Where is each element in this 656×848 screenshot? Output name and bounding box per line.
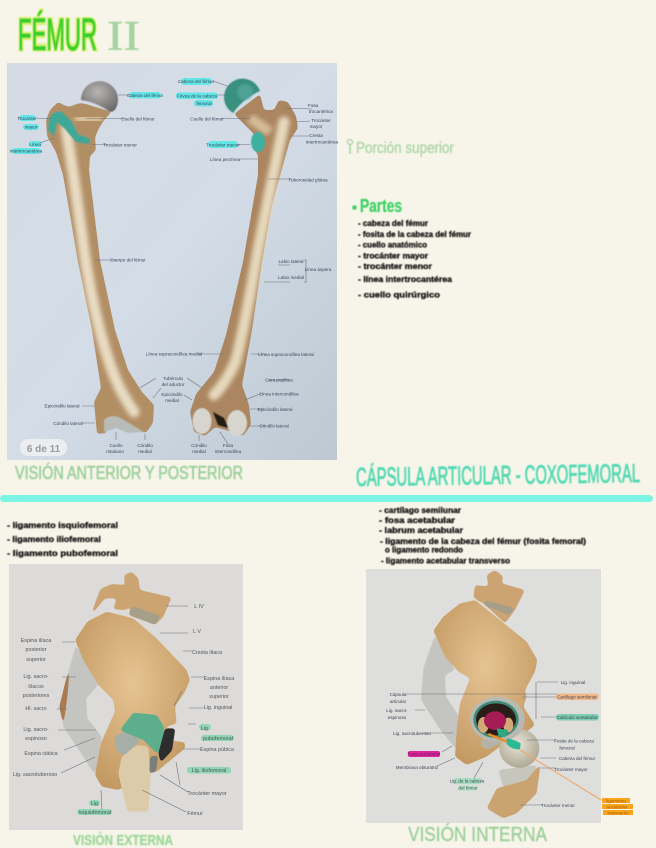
callout: orange label: transverso xyxy=(607,810,629,816)
highlighted labels posterior: Trocánter xyxy=(311,118,331,123)
panel: hip internal view photo xyxy=(366,569,601,823)
list: partes del fémur: - fosita de la cabeza del fémur xyxy=(358,230,471,239)
highlighted labels anterior: rotuliano xyxy=(106,449,124,454)
highlighted labels anterior: Cuerpo del fémur xyxy=(110,258,146,262)
labels external: Trocánter mayor xyxy=(187,791,227,797)
panel: hip external view photo xyxy=(9,564,243,830)
highlighted labels posterior: Línea supracondílea lateral xyxy=(258,352,314,357)
femur anterior bone xyxy=(46,81,154,434)
labels external: L IV xyxy=(194,604,204,610)
labels external: Lig. sacro- xyxy=(23,727,49,733)
highlighted labels posterior: mayor xyxy=(310,124,323,129)
labels external: superior xyxy=(209,694,229,700)
highlighted labels posterior: Labio lateral xyxy=(278,259,304,264)
highlighted labels posterior: medial xyxy=(192,449,206,454)
title: Fémur II: FÉMUR xyxy=(18,9,97,60)
labels internal: Trocánter menor xyxy=(541,803,575,808)
page counter badge: 6 de 11 xyxy=(27,444,61,455)
highlighted labels anterior: Trocánter menor xyxy=(103,142,137,148)
highlighted labels posterior xyxy=(146,78,339,454)
hip bone internal xyxy=(421,570,541,818)
labels internal: Cartílago semilunar xyxy=(557,694,597,700)
highlighted labels anterior: del aductor xyxy=(162,382,185,387)
labels external: Lig. xyxy=(201,726,209,732)
heading: partes: Partes xyxy=(360,196,402,216)
highlighted labels anterior: medial xyxy=(165,398,179,403)
labels external: espinoso xyxy=(25,736,47,742)
highlighted labels posterior: intercondílea xyxy=(215,449,242,454)
highlighted labels anterior: Cuello del fémur xyxy=(121,116,155,122)
labels external: posteriores xyxy=(23,693,50,699)
labels external: Espina púbica xyxy=(200,747,234,753)
labels internal: Lig. de la cabeza xyxy=(450,778,485,784)
labels external: Fémur xyxy=(187,811,203,817)
labels external: posterior xyxy=(26,647,47,653)
labels internal: Fosita de la cabeza xyxy=(554,738,594,744)
callout: orange label: ligamento xyxy=(606,798,626,804)
highlighted labels anterior: Línea xyxy=(29,142,41,147)
labels external: Espina ilíaca xyxy=(21,638,51,644)
highlighted labels anterior: Tubérculo xyxy=(163,376,184,381)
highlighted labels anterior xyxy=(10,92,202,454)
labels internal: Lig. sacrotuberoso xyxy=(393,731,431,736)
labels internal: espinoso xyxy=(388,715,407,720)
labels external: Lig. inguinal xyxy=(204,705,232,711)
labels internal xyxy=(386,680,598,808)
labels external: Lig. xyxy=(91,801,99,807)
divider bar xyxy=(0,495,653,502)
labels external: pubofemoral xyxy=(203,736,233,742)
highlighted labels anterior: mayor xyxy=(25,124,38,130)
highlighted labels anterior: Epicóndilo lateral xyxy=(44,404,80,408)
highlighted labels posterior: Cara poplítea xyxy=(265,378,293,382)
labels internal: Cubículo acetabular xyxy=(557,715,598,720)
labels internal: articular xyxy=(390,699,407,704)
labels external: Hl. sacro xyxy=(25,706,47,712)
list: cápsula: - ligamento acetabular transverso xyxy=(381,556,510,566)
labels external: anterior xyxy=(210,685,228,691)
highlighted labels anterior: intertrocantérea xyxy=(10,148,43,154)
page counter badge xyxy=(20,439,67,456)
highlighted labels anterior: Epicóndilo xyxy=(161,392,183,397)
labels internal: Membrana obturatriz xyxy=(396,765,439,770)
panel: femur anterior and posterior photo xyxy=(7,63,339,460)
caption: visión anterior y posterior: VISIÓN ANTERIOR Y POSTERIOR xyxy=(15,462,243,483)
highlighted labels anterior: medial xyxy=(138,449,152,454)
labels external xyxy=(13,604,234,817)
highlighted labels posterior: Fóvea de la cabeza xyxy=(177,94,217,98)
callout: orange label xyxy=(602,798,633,816)
highlighted labels posterior: Línea pectínea xyxy=(210,157,241,162)
highlighted labels posterior: femoral xyxy=(196,101,212,106)
highlighted labels posterior: Epicóndilo lateral xyxy=(258,407,292,412)
labels external: L V xyxy=(193,629,201,635)
highlighted labels posterior: Fosa xyxy=(223,443,234,448)
labels external: Cresta ilíaca xyxy=(192,650,222,656)
list: partes del fémur: - trocánter menor xyxy=(358,262,432,271)
list: cápsula: - cartílago semilunar xyxy=(379,506,461,515)
list: cápsula: - fosa acetabular xyxy=(379,516,455,525)
labels external: Lig. sacrotuberoso xyxy=(13,772,57,778)
highlighted labels posterior: intertrocantérea xyxy=(306,140,339,144)
list: partes del fémur: - trocánter mayor xyxy=(358,252,428,260)
labels internal: Cabeza del fémur xyxy=(559,756,596,761)
labels external: Lig. iliofemoral xyxy=(192,768,226,774)
highlighted labels anterior: Cóndilo xyxy=(137,443,153,448)
list: cápsula: o ligamento redondo xyxy=(385,546,463,554)
list: ligamentos: - ligamento iliofemoral xyxy=(7,535,101,544)
highlighted labels anterior: Cuello xyxy=(109,443,123,448)
list: cápsula xyxy=(379,506,586,566)
highlighted labels anterior: Cóndilo lateral xyxy=(53,421,83,426)
labels internal: Lig. inguinal xyxy=(561,680,585,685)
highlighted labels posterior: Cóndilo xyxy=(191,443,207,448)
highlighted labels posterior: Tuberosidad glútea xyxy=(288,178,328,182)
list: ligamentos: - ligamento pubofemoral xyxy=(7,549,118,558)
labels internal: Trocánter mayor xyxy=(554,767,588,772)
labels external: ilíacos xyxy=(28,684,44,690)
labels internal: Cápsula xyxy=(390,692,407,697)
highlighted labels posterior: trocantérica xyxy=(309,109,333,114)
labels internal: Lig. sacro- xyxy=(386,708,408,713)
list: ligamentos: - ligamento isquiofemoral xyxy=(7,521,118,530)
highlighted labels posterior: Cabeza del fémur xyxy=(178,79,215,84)
highlighted labels posterior: Trocánter menor xyxy=(206,142,240,148)
list: partes del fémur: - cabeza del fémur xyxy=(358,219,428,228)
list: partes del fémur: - línea intertrocantérea xyxy=(358,275,453,284)
highlighted labels anterior: Cabeza del fémur xyxy=(127,93,164,98)
hip bone external xyxy=(59,572,190,812)
highlighted labels anterior: Trocánter xyxy=(17,116,37,121)
highlighted labels posterior: Línea intercondílea xyxy=(259,392,299,396)
labels external: Espina ciática xyxy=(24,751,58,757)
list: partes del fémur xyxy=(358,219,471,300)
list: ligamentos xyxy=(7,521,118,558)
list: cápsula: - labrum acetabular xyxy=(379,526,463,535)
labels internal: Fosa acetabular xyxy=(408,752,441,756)
labels external: Lig. sacro- xyxy=(23,674,49,680)
highlighted labels posterior: Cresta xyxy=(309,133,323,138)
highlighted labels posterior: Fosa xyxy=(308,103,319,108)
list: partes del fémur: - cuello quirúrgico xyxy=(358,290,440,300)
labels internal: del fémur xyxy=(458,786,478,790)
highlighted labels posterior: Línea áspera xyxy=(305,267,332,272)
labels internal: femoral xyxy=(559,746,575,750)
title: Fémur II: II xyxy=(107,14,140,60)
labels external: superior xyxy=(26,657,46,663)
list: partes del fémur: - cuello anatómico xyxy=(358,240,427,250)
femur posterior bone xyxy=(190,79,298,436)
heading: porción superior: Porción superior xyxy=(356,140,455,157)
highlighted labels posterior: Cuello del fémur xyxy=(190,116,224,122)
highlighted labels posterior: Cóndilo lateral xyxy=(259,424,289,428)
list: cápsula: - ligamento de la cabeza del fémur (fosita femoral) xyxy=(380,537,586,546)
highlighted labels posterior: Línea supracondílea medial xyxy=(146,352,202,356)
caption: visión interna: VISIÓN INTERNA xyxy=(408,823,548,846)
labels external: isquiofemoral xyxy=(79,810,111,816)
heading: partes xyxy=(352,196,402,216)
title: Fémur II: FÉMUR xyxy=(18,9,97,60)
highlighted labels posterior: Labio medial xyxy=(278,275,304,280)
callout: orange label: acetabular xyxy=(606,804,628,810)
labels external: Espina ilíaca xyxy=(204,676,234,682)
